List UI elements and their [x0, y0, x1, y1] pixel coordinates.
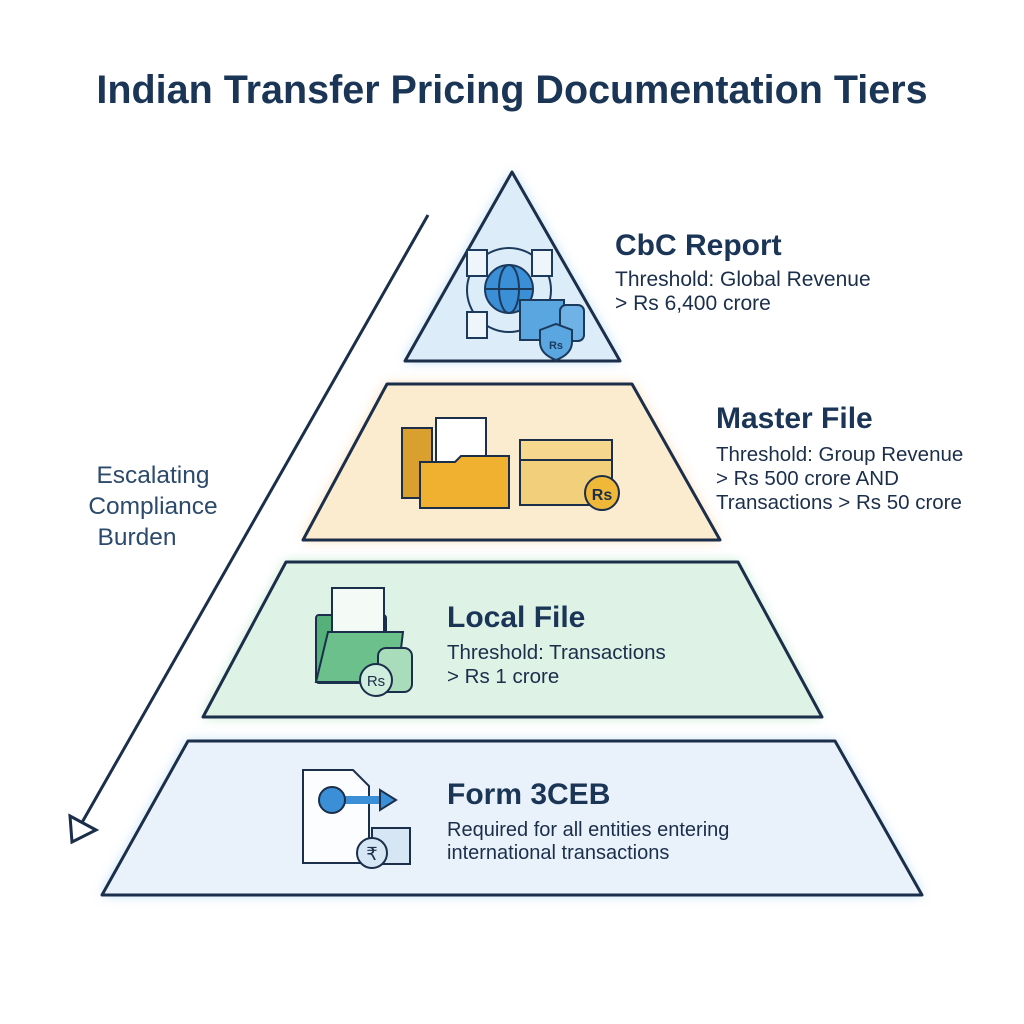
- label: escalating compliance burden: Escalating: [96, 462, 210, 489]
- text: Form 3CEB: international transactions: [447, 842, 669, 864]
- text: Form 3CEB: [447, 778, 729, 864]
- tier 1: CbC Report: Rs: [549, 340, 563, 352]
- text: Form 3CEB: Form 3CEB: [447, 778, 610, 811]
- text: CbC Report: [615, 229, 871, 315]
- text: Master File: Transactions > Rs 50 crore: [716, 491, 962, 514]
- label: escalating compliance burden: Burden: [97, 524, 177, 551]
- title: Indian Transfer Pricing Documentation Tiers: [96, 68, 928, 112]
- icon: globe network: [467, 248, 584, 360]
- tier 2: Master File: Rs: [592, 487, 612, 504]
- text: Local File: Threshold: Transactions: [447, 641, 666, 664]
- text: Master File: > Rs 500 crore AND: [716, 467, 899, 490]
- tier 4: Form 3CEB: ₹: [366, 844, 378, 864]
- tier 4: Form 3CEB: [102, 741, 922, 895]
- text: CbC Report: > Rs 6,400 crore: [615, 292, 771, 315]
- text: Master File: [716, 402, 963, 514]
- label: escalating compliance burden: Compliance: [88, 493, 218, 520]
- tier 3: Local File: Rs: [367, 673, 385, 690]
- text: Form 3CEB: Required for all entities entering: [447, 819, 729, 841]
- text: CbC Report: Threshold: Global Revenue: [615, 268, 871, 291]
- icon: document globe rupee: [303, 770, 410, 868]
- text: Local File: Local File: [447, 601, 585, 634]
- label: escalating compliance burden: [88, 462, 218, 551]
- tier 3: Local File: [203, 562, 822, 717]
- icon: green folder with coins: [316, 588, 412, 696]
- text: CbC Report: CbC Report: [615, 229, 782, 262]
- tier 1: CbC Report: [405, 172, 620, 361]
- tier 2: Master File: [303, 384, 720, 540]
- text: Local File: > Rs 1 crore: [447, 665, 559, 688]
- text: Local File: [447, 601, 666, 688]
- text: Master File: Threshold: Group Revenue: [716, 443, 963, 466]
- arrow: escalating burden: [70, 215, 428, 842]
- text: Master File: Master File: [716, 402, 873, 435]
- icon: folder and money: [402, 418, 619, 510]
